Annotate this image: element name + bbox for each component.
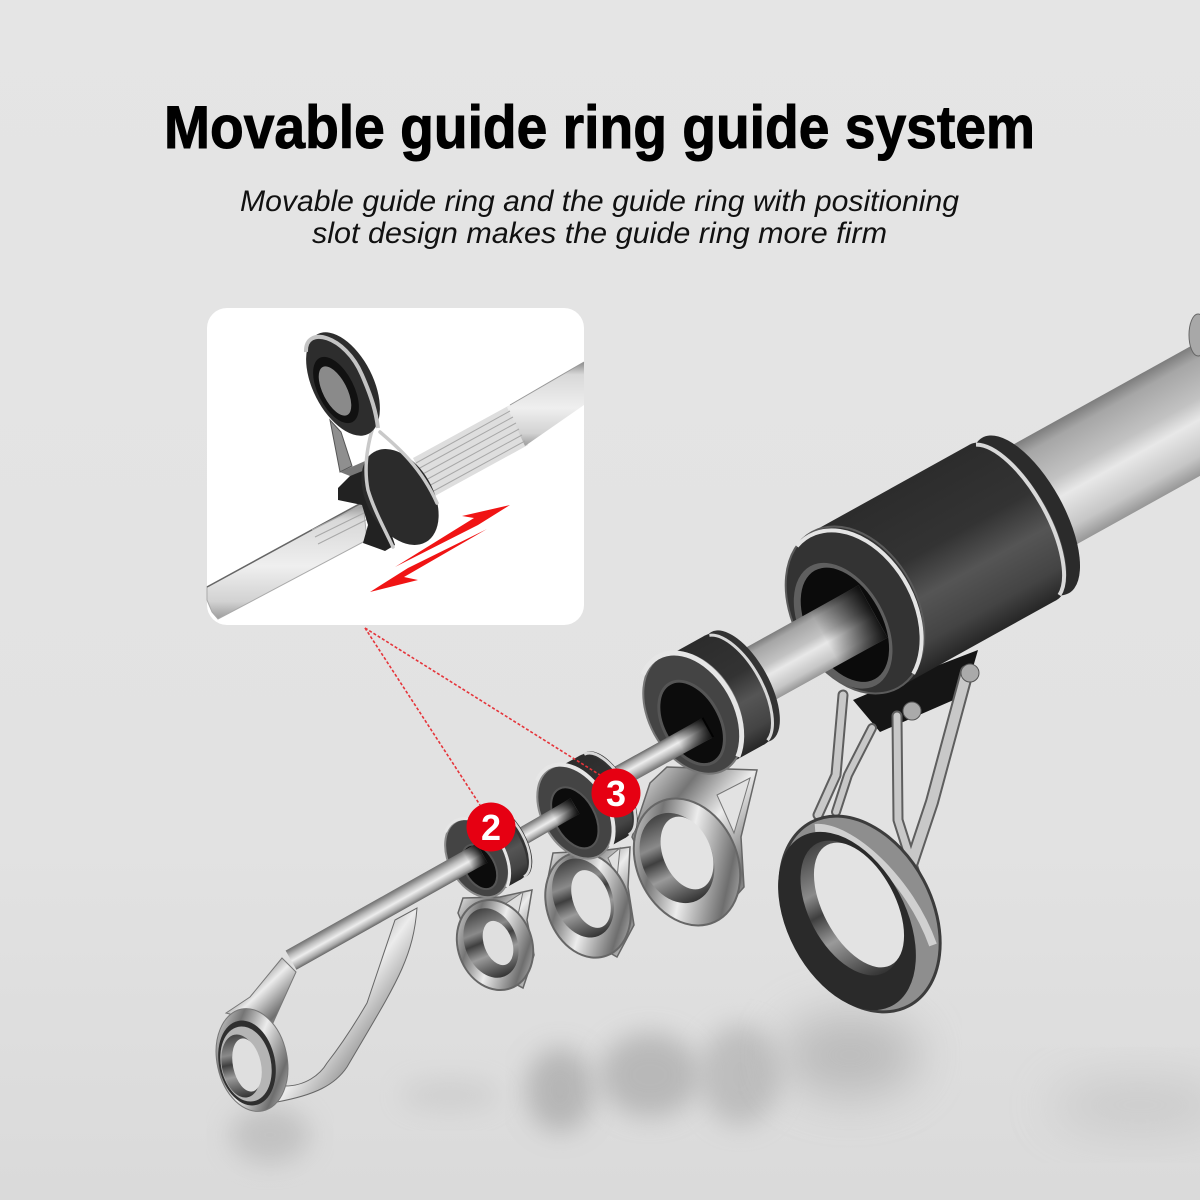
large rod section — [988, 255, 1200, 562]
icon: down arrow — [370, 529, 487, 592]
tip ring — [207, 1002, 297, 1118]
badge: number 3: 3 — [606, 773, 626, 814]
subtitle: slot design makes the guide ring more firm — [312, 217, 887, 250]
tip rod section — [286, 843, 487, 970]
icon: up arrow — [395, 505, 510, 567]
frame — [547, 847, 634, 957]
badge: number 2 — [466, 802, 516, 852]
subtitle — [240, 185, 959, 250]
collar — [521, 738, 651, 872]
blurred rod shadow — [230, 1013, 1200, 1163]
tip guide — [207, 908, 417, 1118]
subtitle: Movable guide ring and the guide ring with positioning — [240, 185, 959, 218]
badge: number 2: 2 — [481, 807, 501, 848]
large guide collar — [758, 419, 1102, 718]
guide ring two — [521, 738, 651, 970]
frame — [458, 890, 534, 988]
inset guide ring — [291, 320, 395, 448]
fourth rod section — [474, 798, 580, 870]
guide ring one — [614, 615, 797, 943]
inset panel: sliding guide ring detail — [207, 308, 584, 625]
inset rod — [207, 362, 584, 619]
tip connector — [226, 958, 296, 1025]
tip strap — [277, 908, 417, 1102]
inset collar — [345, 435, 455, 559]
large guide ring — [748, 788, 972, 1040]
second rod section — [657, 585, 888, 749]
rod end collar — [1189, 314, 1200, 356]
badge: number 3 — [592, 768, 640, 818]
guide ring three — [432, 795, 546, 1001]
inset guide frame — [330, 420, 395, 551]
frame — [632, 767, 757, 923]
rod assembly with guide rings — [207, 255, 1200, 1118]
large guide frame — [818, 650, 979, 940]
collar — [623, 615, 797, 791]
inset silver wire — [366, 427, 437, 547]
dashed callout lines — [365, 628, 600, 805]
third rod section — [553, 717, 714, 820]
title: Movable guide ring guide system — [164, 94, 1035, 161]
collar — [432, 795, 544, 908]
